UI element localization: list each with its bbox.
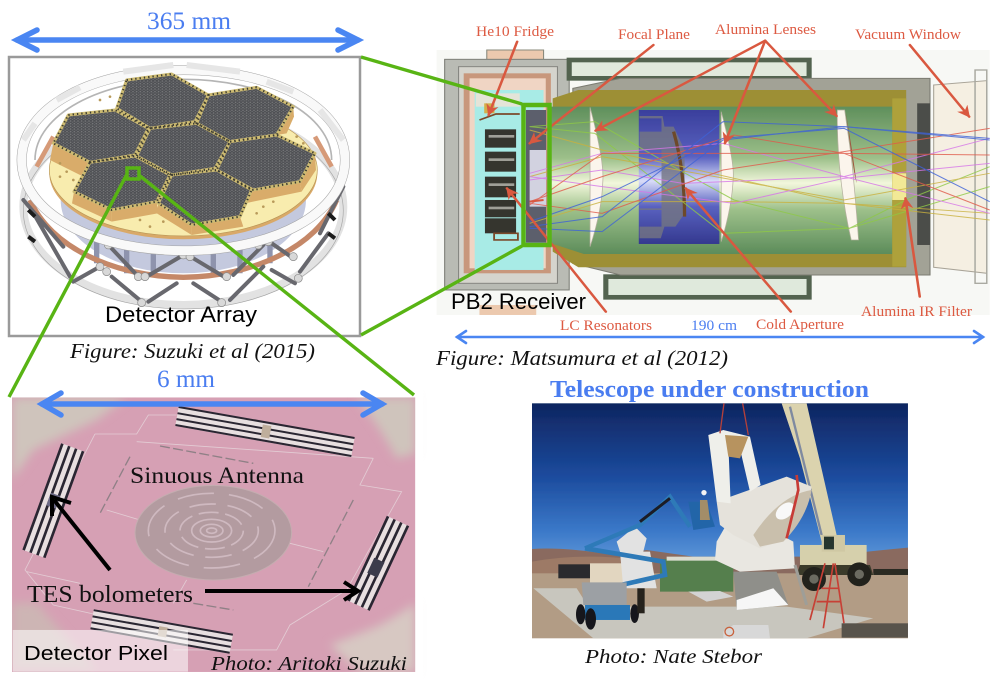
wiring	[25, 415, 402, 650]
top and bottom flanges	[487, 50, 544, 62]
detector array frame	[9, 57, 360, 336]
disk	[49, 107, 317, 239]
red stepladder	[810, 563, 844, 628]
sky	[532, 403, 908, 562]
arrow: to right bolometer	[205, 582, 358, 600]
dimension arrow: 365 mm	[17, 30, 358, 50]
other telescope	[617, 527, 657, 588]
hills	[532, 548, 908, 578]
label backdrop	[13, 630, 188, 672]
red callout arrows	[489, 41, 969, 312]
lenses	[590, 107, 603, 247]
green interior	[551, 107, 892, 254]
panel: detector array	[9, 57, 360, 336]
pink wafer	[12, 397, 415, 672]
hexagon modules	[50, 107, 316, 235]
white surround mask	[0, 383, 423, 681]
zoom marker on array	[127, 168, 139, 179]
caption: Suzuki: Figure: Suzuki et al (2015)	[69, 339, 315, 363]
dimension arrow: 6 mm	[42, 393, 382, 415]
zoom lines: green connectors	[9, 57, 550, 397]
label: PB2 Receiver: PB2 Receiver	[451, 289, 586, 314]
struts	[23, 187, 343, 302]
receiver background	[437, 50, 990, 315]
arrow: to left bolometer	[52, 497, 110, 570]
panel: detector pixel photo	[12, 397, 416, 672]
dark filter slot	[917, 103, 930, 245]
labels: receiver parts: Focal Plane	[618, 27, 690, 43]
lower ring	[23, 108, 343, 305]
label: TES bolometers: TES bolometers	[27, 582, 193, 608]
focal plane highlight	[524, 105, 550, 245]
olive shell	[553, 90, 906, 267]
cylinder	[61, 127, 306, 273]
readout stack	[485, 129, 516, 233]
ground	[532, 573, 908, 638]
housing	[445, 59, 569, 290]
illustration: pixel	[12, 397, 416, 672]
wafer corner shading	[12, 397, 415, 672]
optical rays	[530, 122, 990, 233]
labels: receiver parts: LC Resonators	[560, 318, 652, 334]
gray tube	[573, 78, 930, 275]
panel: receiver cross-section	[437, 22, 990, 334]
credit: Nate Stebor: Photo: Nate Stebor	[584, 646, 762, 668]
credit: Aritoki Suzuki: Photo: Aritoki Suzuki	[210, 654, 407, 675]
vacuum window	[934, 81, 987, 273]
labels: receiver parts: Alumina IR Filter	[861, 304, 972, 320]
copper band	[30, 200, 337, 277]
connectors to receiver	[361, 57, 522, 335]
dimension arrow: 190 cm	[457, 331, 983, 343]
crane	[782, 403, 837, 542]
label: detector array: Detector Array	[105, 302, 257, 327]
dimension label: 190 cm: 190 cm	[691, 318, 738, 334]
dimension label: 365 mm: 365 mm	[147, 8, 232, 35]
telescope mount	[733, 572, 788, 610]
illustration: receiver	[437, 41, 990, 315]
labels: receiver parts: Cold Aperture	[756, 317, 844, 333]
disk holes	[59, 95, 305, 228]
copper side straps	[37, 137, 332, 167]
caption: Matsumura: Figure: Matsumura et al (2012)	[435, 346, 728, 370]
label: Sinuous Antenna: Sinuous Antenna	[130, 463, 304, 488]
illustration: detector array	[22, 65, 345, 309]
dimension label: 6 mm: 6 mm	[157, 366, 216, 393]
outer ring	[22, 70, 345, 251]
foreground items	[723, 625, 770, 638]
concrete pad	[533, 588, 873, 638]
labels: receiver parts: Alumina Lenses	[715, 22, 816, 38]
labels: receiver parts	[476, 22, 972, 334]
labels: receiver parts: He10 Fridge	[476, 24, 554, 40]
dark green frames	[569, 60, 809, 78]
detector cold stage	[526, 110, 546, 243]
sinuous antenna	[135, 485, 292, 580]
blue cold aperture	[639, 110, 719, 244]
boom lift	[585, 497, 690, 548]
label: Detector Pixel: Detector Pixel	[24, 643, 168, 665]
photo: telescope	[532, 403, 908, 638]
heading: Telescope under construction: Telescope under construction	[550, 377, 869, 403]
labels: receiver parts: Vacuum Window	[855, 27, 962, 43]
bolometer strips	[23, 406, 409, 654]
container and shed	[558, 564, 592, 578]
connectors to pixel	[9, 174, 414, 397]
